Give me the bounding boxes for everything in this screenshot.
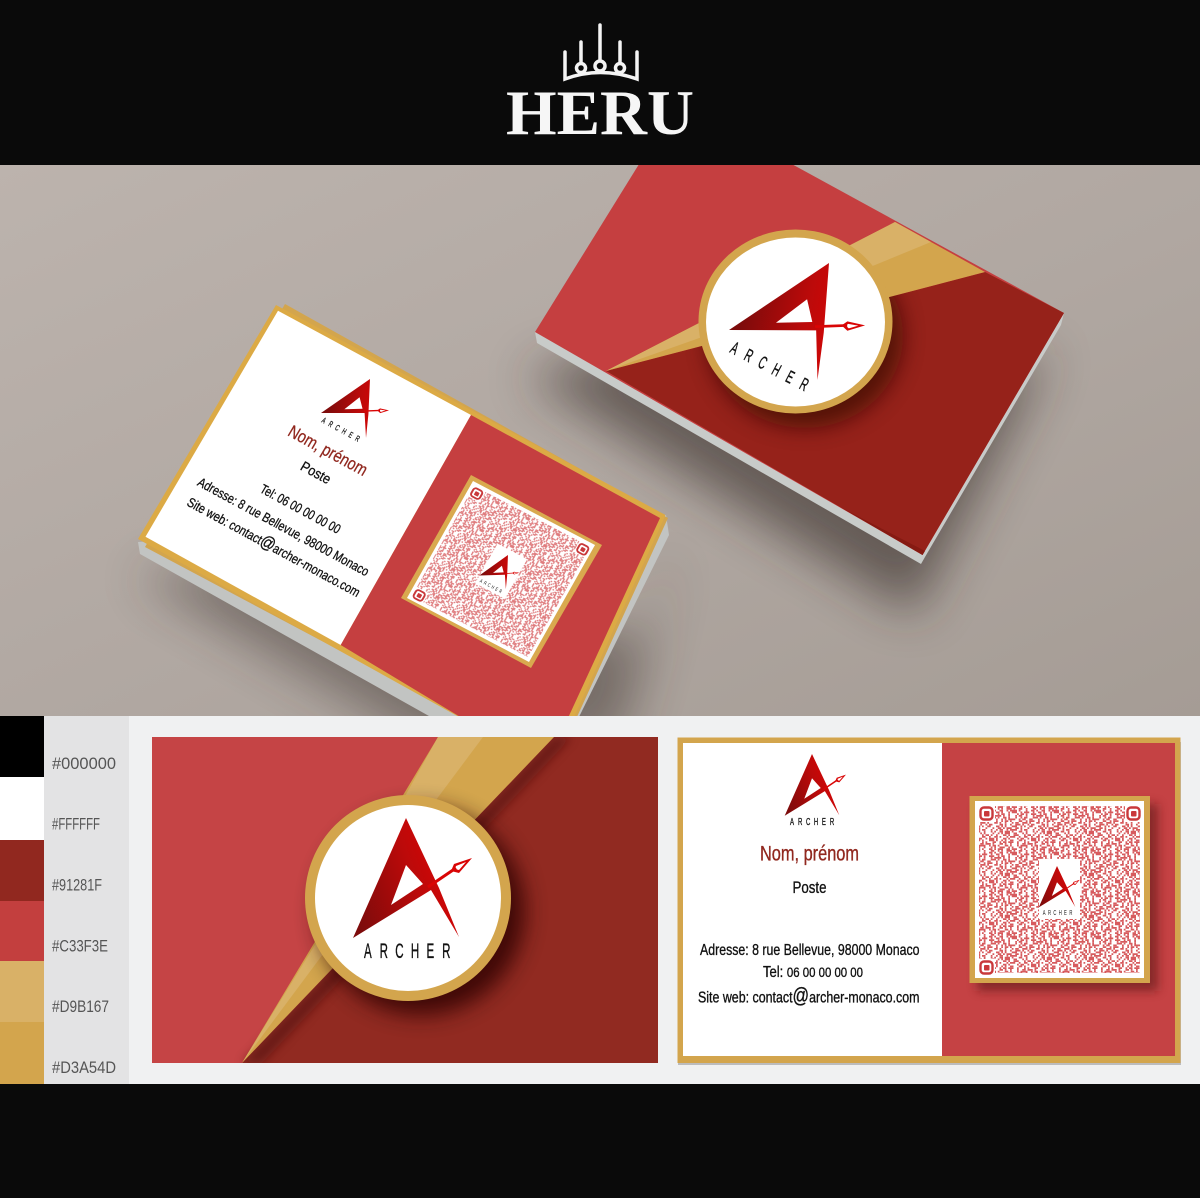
- emblem: [305, 795, 511, 1001]
- gold border: [678, 738, 1180, 1063]
- bottom strip panel: [0, 716, 1200, 1084]
- business card back mockup: [138, 304, 669, 716]
- website: Site web: contact@archer-monaco.com: [184, 491, 365, 601]
- address: Adresse: 8 rue Bellevue, 98000 Monaco: [700, 942, 920, 959]
- swatch dark red: #91281F: [52, 876, 102, 894]
- emblem shadow: [696, 293, 916, 440]
- dark red side: [242, 737, 658, 1063]
- swatch light gold: [0, 961, 109, 1022]
- mockup photo panel: [0, 165, 1200, 768]
- swatch dark red: [0, 840, 102, 901]
- phone: Tel: 06 00 00 00 00: [257, 481, 343, 537]
- emblem wordmark: ARCHER: [364, 939, 450, 963]
- red panel: [340, 415, 660, 716]
- shadow: left card: [142, 560, 668, 716]
- shadow: top card: [525, 330, 1050, 615]
- emblem wordmark: ARCHER: [727, 339, 811, 396]
- name: Nom, prénom: [285, 421, 371, 480]
- swatch black: #000000: [52, 754, 116, 773]
- card shadow: [678, 742, 1181, 1065]
- emblem: [698, 230, 892, 414]
- card stack edge: [138, 515, 669, 725]
- swatch black: [0, 716, 116, 777]
- QR code: [407, 481, 595, 662]
- red side: [152, 737, 554, 1063]
- business card front mockup: [535, 165, 1064, 564]
- job title: Poste: [297, 459, 333, 488]
- QR frame: [970, 796, 1150, 983]
- logo wordmark: ARCHER: [790, 817, 834, 827]
- emblem shadow: [317, 807, 525, 1015]
- swatch gold: #D3A54D: [52, 1058, 116, 1077]
- gold band: [606, 222, 985, 371]
- swatch red: [0, 901, 108, 961]
- second gold layer: [145, 304, 668, 716]
- QR code: ARCHER: [479, 578, 504, 595]
- red panel: [942, 743, 1175, 1056]
- swatch white: #FFFFFF: [52, 814, 100, 834]
- phone: Tel: 06 00 00 00 00: [763, 964, 863, 981]
- icon: crown: [565, 25, 637, 79]
- swatch light gold: #D9B167: [52, 997, 109, 1016]
- white panel: [683, 743, 942, 1056]
- brand name: HERU: [506, 77, 694, 148]
- address: Adresse: 8 rue Bellevue, 98000 Monaco: [195, 475, 372, 579]
- QR code: [975, 801, 1144, 978]
- swatch gold: [0, 1022, 116, 1084]
- website: Site web: contact@archer-monaco.com: [698, 984, 920, 1008]
- logo: [321, 379, 389, 438]
- QR shadow: [977, 804, 1158, 991]
- QR frame: [401, 475, 602, 668]
- panel: flat card front: [152, 737, 658, 1063]
- white panel: [146, 311, 471, 645]
- job title: Poste: [792, 878, 826, 897]
- panel: flat card back: [678, 738, 1181, 1065]
- logo: [785, 754, 846, 816]
- card stack edge: [535, 313, 1064, 564]
- band shadow: [242, 737, 572, 1063]
- swatch red: #C33F3E: [52, 936, 108, 956]
- gold border: [138, 305, 666, 716]
- dark red side: [606, 272, 1064, 555]
- panel: colour palette: [0, 716, 129, 1084]
- top header band: [0, 0, 1200, 165]
- swatch white: [0, 777, 100, 840]
- QR code: ARCHER: [1043, 910, 1072, 917]
- name: Nom, prénom: [760, 842, 859, 866]
- logo wordmark: ARCHER: [320, 417, 361, 444]
- red side: [535, 165, 1064, 555]
- bottom footer band: [0, 1084, 1200, 1198]
- gold band: [242, 737, 554, 1063]
